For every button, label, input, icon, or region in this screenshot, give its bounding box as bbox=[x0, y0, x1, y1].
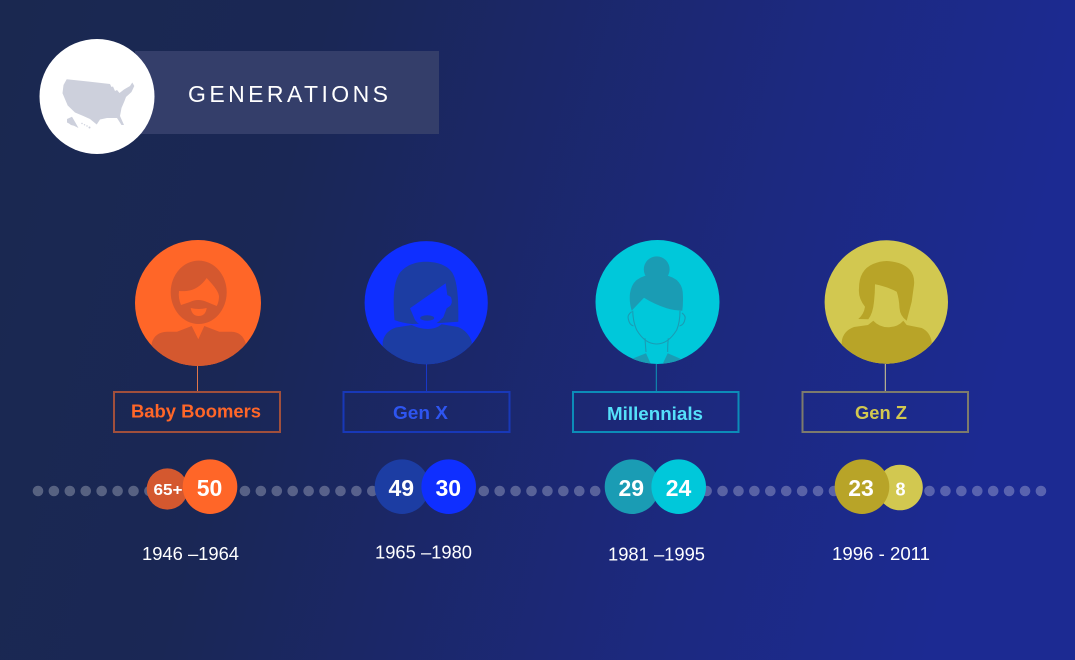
label: millennials: Millennials bbox=[607, 404, 703, 424]
header circle bbox=[40, 39, 154, 154]
age bubbles: 29 bbox=[619, 475, 644, 501]
label: baby boomers: Baby Boomers bbox=[131, 402, 261, 422]
label: millennials bbox=[573, 392, 738, 432]
connector bbox=[655, 364, 657, 391]
label: baby boomers bbox=[114, 392, 280, 432]
connector bbox=[196, 366, 198, 391]
age bubbles: 24 bbox=[666, 475, 691, 501]
age bubbles bbox=[835, 459, 923, 514]
panel: millennials bbox=[573, 240, 738, 564]
panel: gen x bbox=[344, 241, 510, 563]
age bubbles bbox=[605, 459, 706, 514]
icon: young woman bbox=[825, 240, 948, 370]
dotted timeline bbox=[38, 486, 1042, 496]
panel: gen z bbox=[802, 240, 968, 564]
age bubbles bbox=[375, 459, 476, 514]
label: gen x: Gen X bbox=[393, 403, 448, 423]
icon: woman with bob bbox=[365, 241, 488, 370]
age bubbles: 23 bbox=[848, 475, 874, 501]
label: gen x bbox=[344, 392, 510, 432]
icon: USA map bbox=[62, 79, 134, 128]
icon: bearded man bbox=[135, 240, 261, 370]
age bubbles: 30 bbox=[436, 475, 461, 501]
heading: GENERATIONS bbox=[188, 81, 388, 107]
icon: woman with bun bbox=[596, 240, 720, 366]
title band bbox=[135, 51, 439, 134]
label: gen z bbox=[802, 392, 968, 432]
connector bbox=[426, 364, 428, 391]
label: gen z: Gen Z bbox=[855, 403, 907, 423]
age bubbles: 49 bbox=[389, 475, 414, 501]
panel: baby boomers bbox=[114, 240, 280, 564]
years: 1981 –1995 bbox=[608, 544, 705, 564]
years: 1946 –1964 bbox=[142, 544, 239, 564]
years: 1996 - 2011 bbox=[832, 544, 930, 564]
connector bbox=[884, 364, 886, 391]
age bubbles: 50 bbox=[197, 475, 222, 501]
years: 1965 –1980 bbox=[375, 543, 472, 563]
age bubbles: 8 bbox=[895, 480, 906, 500]
age bubbles: 65+ bbox=[154, 482, 182, 499]
age bubbles bbox=[147, 459, 237, 514]
header: generations bbox=[40, 39, 439, 154]
